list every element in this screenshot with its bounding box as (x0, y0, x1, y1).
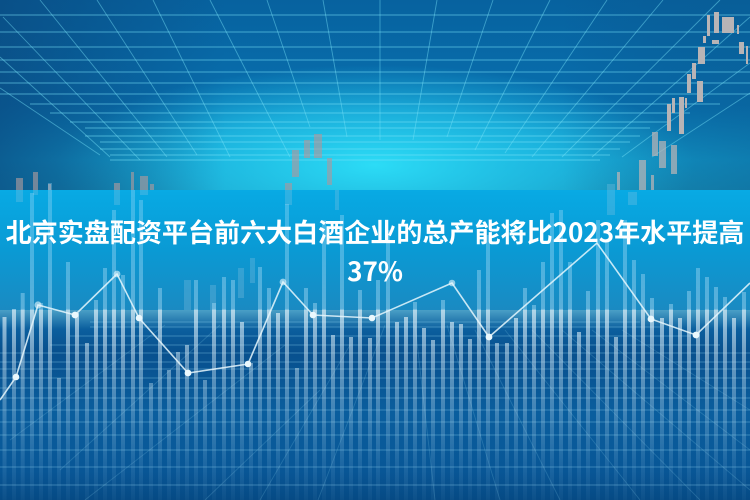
lower dark panel (0, 310, 750, 500)
perspective grid (0, 0, 750, 160)
faint candles in band (16, 184, 637, 310)
sky background gradient (0, 0, 750, 190)
line chart (0, 243, 750, 400)
lower perspective grid (0, 322, 750, 500)
bar chart (2, 183, 746, 500)
title: 北京实盘配资平台前六大白酒企业的总产能将比2023年水平提高37% (6, 212, 744, 289)
candlesticks (16, 12, 748, 190)
translucent title band (0, 190, 750, 310)
